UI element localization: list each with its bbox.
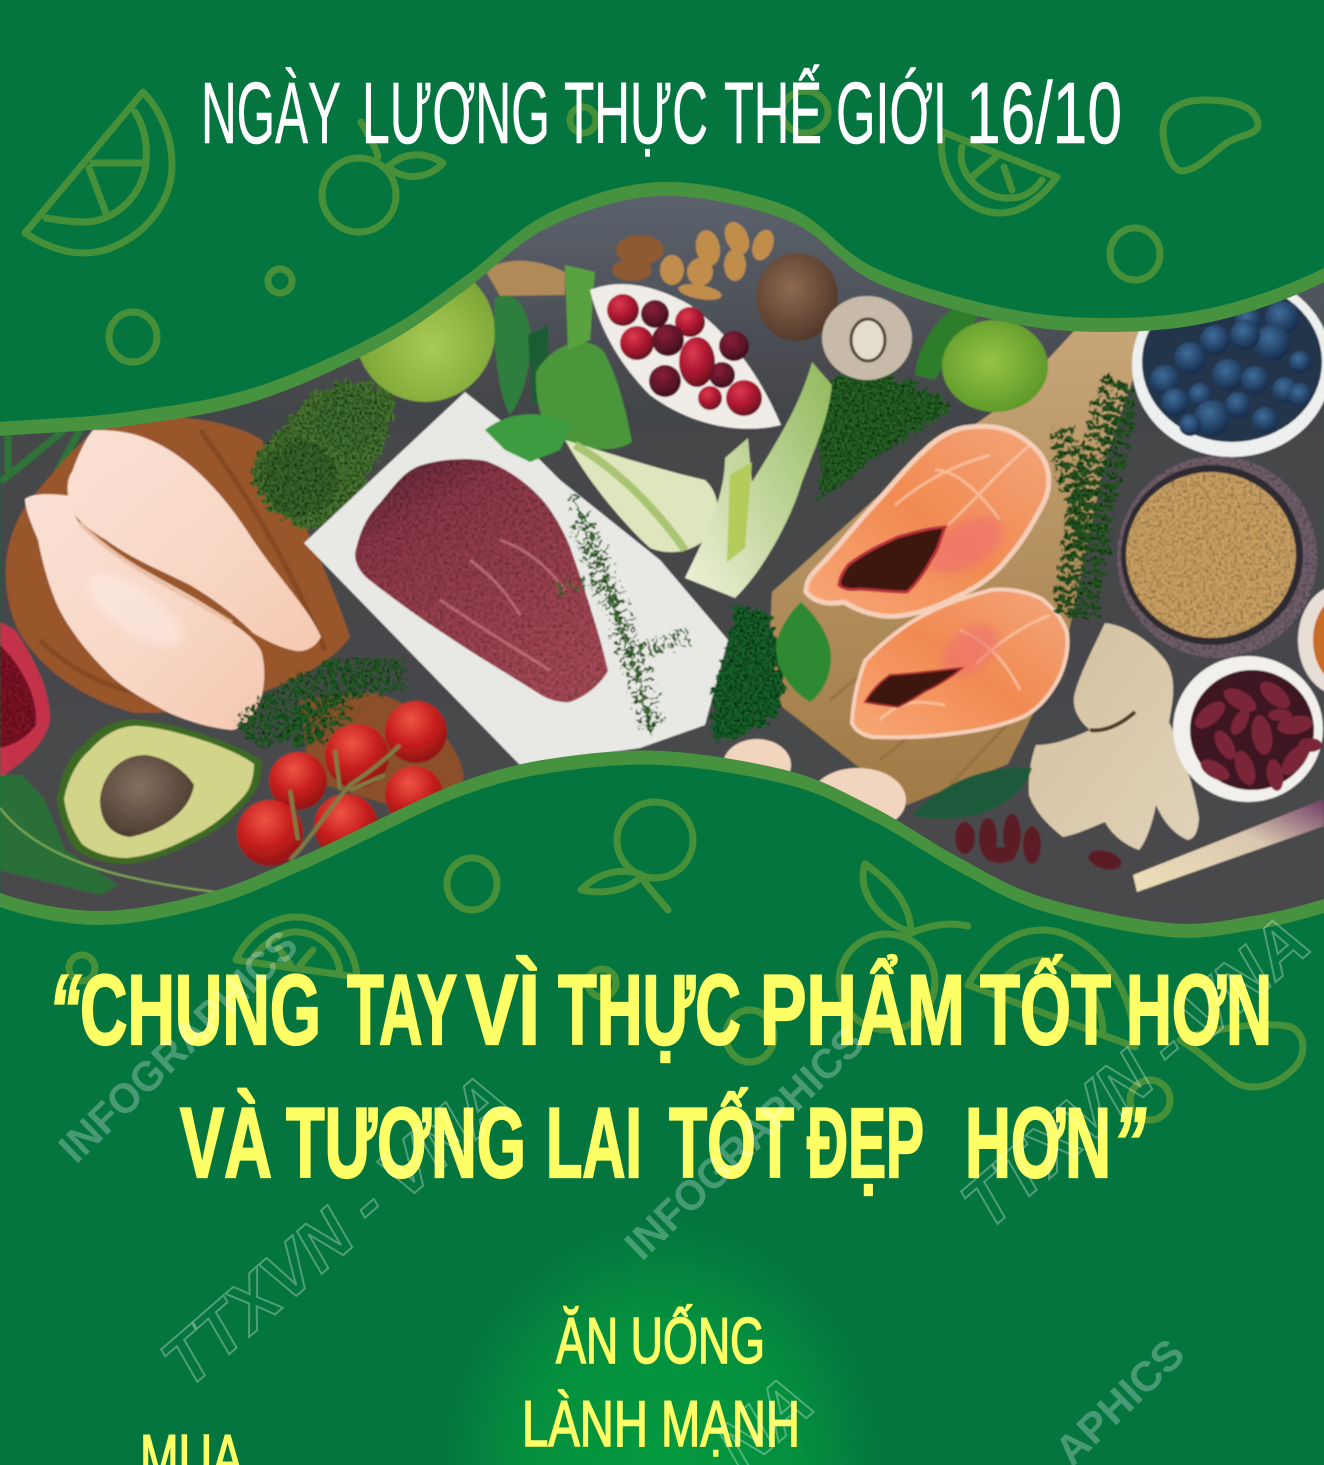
apple	[355, 262, 495, 402]
headline line 1: TAY	[347, 954, 457, 1065]
chicken breast front	[25, 494, 264, 730]
chicken highlight	[77, 560, 193, 660]
headline line 2: HƠN	[965, 1087, 1111, 1198]
watermark: infographics centre: INFOGRAPHICS	[616, 1018, 873, 1268]
lemongrass	[1133, 799, 1324, 892]
title: 16/10	[966, 65, 1122, 162]
headline line 2: TỐT	[669, 1087, 794, 1198]
small wooden board under tomatoes	[300, 692, 464, 815]
icon: ring behind headline	[588, 969, 616, 997]
icon: lime slice top right	[942, 132, 1057, 213]
ginger piece top	[485, 261, 565, 296]
ginger root	[1029, 623, 1199, 850]
chicken crease	[80, 523, 232, 623]
icon: ring lower right	[1130, 1080, 1170, 1120]
basil leaf	[776, 602, 831, 702]
decorative fruit icons	[25, 91, 1303, 1120]
icon: ring behind text	[726, 1010, 774, 1062]
green leaf over paper	[485, 414, 572, 462]
healthy eating label	[522, 1304, 800, 1460]
icon: lime lower right	[968, 930, 1135, 1047]
lettuce leaf	[536, 342, 632, 449]
icon: bean top right	[1163, 100, 1258, 171]
headline line 2: ĐẸP	[807, 1087, 924, 1198]
arugula leaf	[0, 775, 215, 895]
headline line 1: VÌ	[466, 954, 540, 1065]
dill sprig	[250, 668, 405, 738]
top wave panel	[0, 0, 1324, 422]
label line 1: ĂN UỐNG	[556, 1304, 765, 1377]
icon: ring behind title right	[782, 91, 828, 133]
salmon pink centre bottom	[933, 614, 1007, 686]
icon: ring behind title	[570, 107, 596, 133]
chicken breast back	[68, 430, 321, 651]
rosemary sprig	[558, 495, 690, 735]
headline line 2: VÀ	[180, 1087, 272, 1198]
title: NGÀY	[201, 65, 341, 162]
yellow-green stalk centre	[727, 462, 752, 562]
food photo band	[0, 170, 1324, 950]
cherry tomatoes	[237, 701, 447, 866]
headline line 1: THỰC	[558, 954, 741, 1065]
avocado half	[57, 720, 262, 864]
small dark leaf	[528, 325, 550, 405]
icon: ring right	[1110, 228, 1160, 280]
scattered beans	[955, 814, 1124, 873]
title	[201, 65, 1122, 162]
blueberry bowl	[1132, 273, 1324, 457]
salmon streaks bottom	[880, 615, 1050, 720]
title: GIỚI	[836, 65, 947, 162]
headline line 1: TỐT	[980, 954, 1111, 1065]
beef steak	[355, 459, 608, 702]
avocado pit	[100, 755, 194, 837]
salmon steak bottom	[852, 589, 1068, 737]
headline line 1	[49, 954, 1272, 1065]
grain bowl	[1117, 456, 1317, 658]
title: THẾ	[724, 65, 822, 162]
bottom wave outline	[0, 751, 1324, 1000]
walnuts	[612, 235, 664, 281]
cranberry dish	[590, 284, 781, 429]
beef marbling	[440, 540, 565, 670]
spinach leaves	[494, 295, 530, 415]
dark bay leaf	[912, 768, 1032, 819]
top wave outline	[0, 0, 1324, 436]
broccoli	[252, 381, 395, 530]
pomegranate	[0, 622, 50, 778]
watermarks	[50, 901, 1324, 1465]
parchment paper	[304, 392, 728, 765]
headline line 2: LAI	[546, 1087, 642, 1198]
parsley	[712, 605, 786, 742]
salmon steak top	[806, 426, 1049, 616]
bok choy fennel bulb	[565, 440, 718, 552]
icon: ring left	[109, 312, 157, 362]
headline line 2: TƯƠNG	[286, 1087, 526, 1198]
salmon cavity bottom	[865, 668, 962, 707]
white mushroom	[822, 296, 912, 380]
headline line 2: ”	[1113, 1087, 1146, 1198]
headline line 2	[180, 1087, 1146, 1198]
watermark: ttxvn left: TTXVN - VNA	[147, 1059, 524, 1401]
photo slate background	[0, 170, 1324, 950]
bottom wave panel	[0, 765, 1324, 1465]
headline	[49, 954, 1272, 1198]
kidney bean bowl	[1173, 656, 1323, 802]
watermark: ttxvn right: TTXVN - VNA	[947, 901, 1324, 1243]
lentil bowl	[1298, 585, 1324, 695]
salmon streaks top	[895, 445, 1030, 525]
headline line 1: CHUNG	[80, 954, 321, 1065]
tomato vine	[290, 745, 400, 860]
wooden cutting board right	[767, 330, 1150, 805]
salmon pink centre top	[918, 505, 1012, 585]
lettuce stem	[565, 265, 595, 350]
headline line 1: “	[49, 954, 81, 1065]
headline line 1: PHẨM	[760, 954, 965, 1065]
icon: fruit lower centre	[581, 802, 693, 910]
lime	[942, 320, 1048, 412]
icon: ring lower left	[447, 858, 497, 910]
title: THỰC	[564, 65, 708, 162]
salmon cavity top	[839, 527, 945, 592]
fennel leaf edge	[575, 445, 685, 550]
icon: fruit with leaves right	[839, 864, 968, 1030]
icon: ring small	[268, 269, 292, 293]
wooden board left	[6, 416, 350, 713]
icon: lime slice top left	[25, 92, 172, 253]
celery stalk	[685, 362, 832, 598]
thyme sprig	[1060, 385, 1125, 615]
label line 2: LÀNH MẠNH	[522, 1387, 800, 1460]
green pepper	[915, 305, 978, 380]
eggs	[723, 739, 906, 832]
icon: bean lower right	[1180, 1025, 1303, 1087]
watermark: infographics left: INFOGRAPHICS	[50, 921, 307, 1171]
icon: lime lower left	[236, 917, 357, 977]
almonds	[660, 218, 778, 303]
green beans top left	[3, 430, 80, 480]
glow behind healthy eating circle	[440, 1220, 884, 1465]
brown mushroom	[756, 253, 838, 341]
icon: fruit with leaf	[322, 122, 443, 232]
title: LƯƠNG	[362, 65, 550, 162]
icon: ring far left	[69, 955, 95, 981]
herb leaves centre	[810, 372, 950, 500]
